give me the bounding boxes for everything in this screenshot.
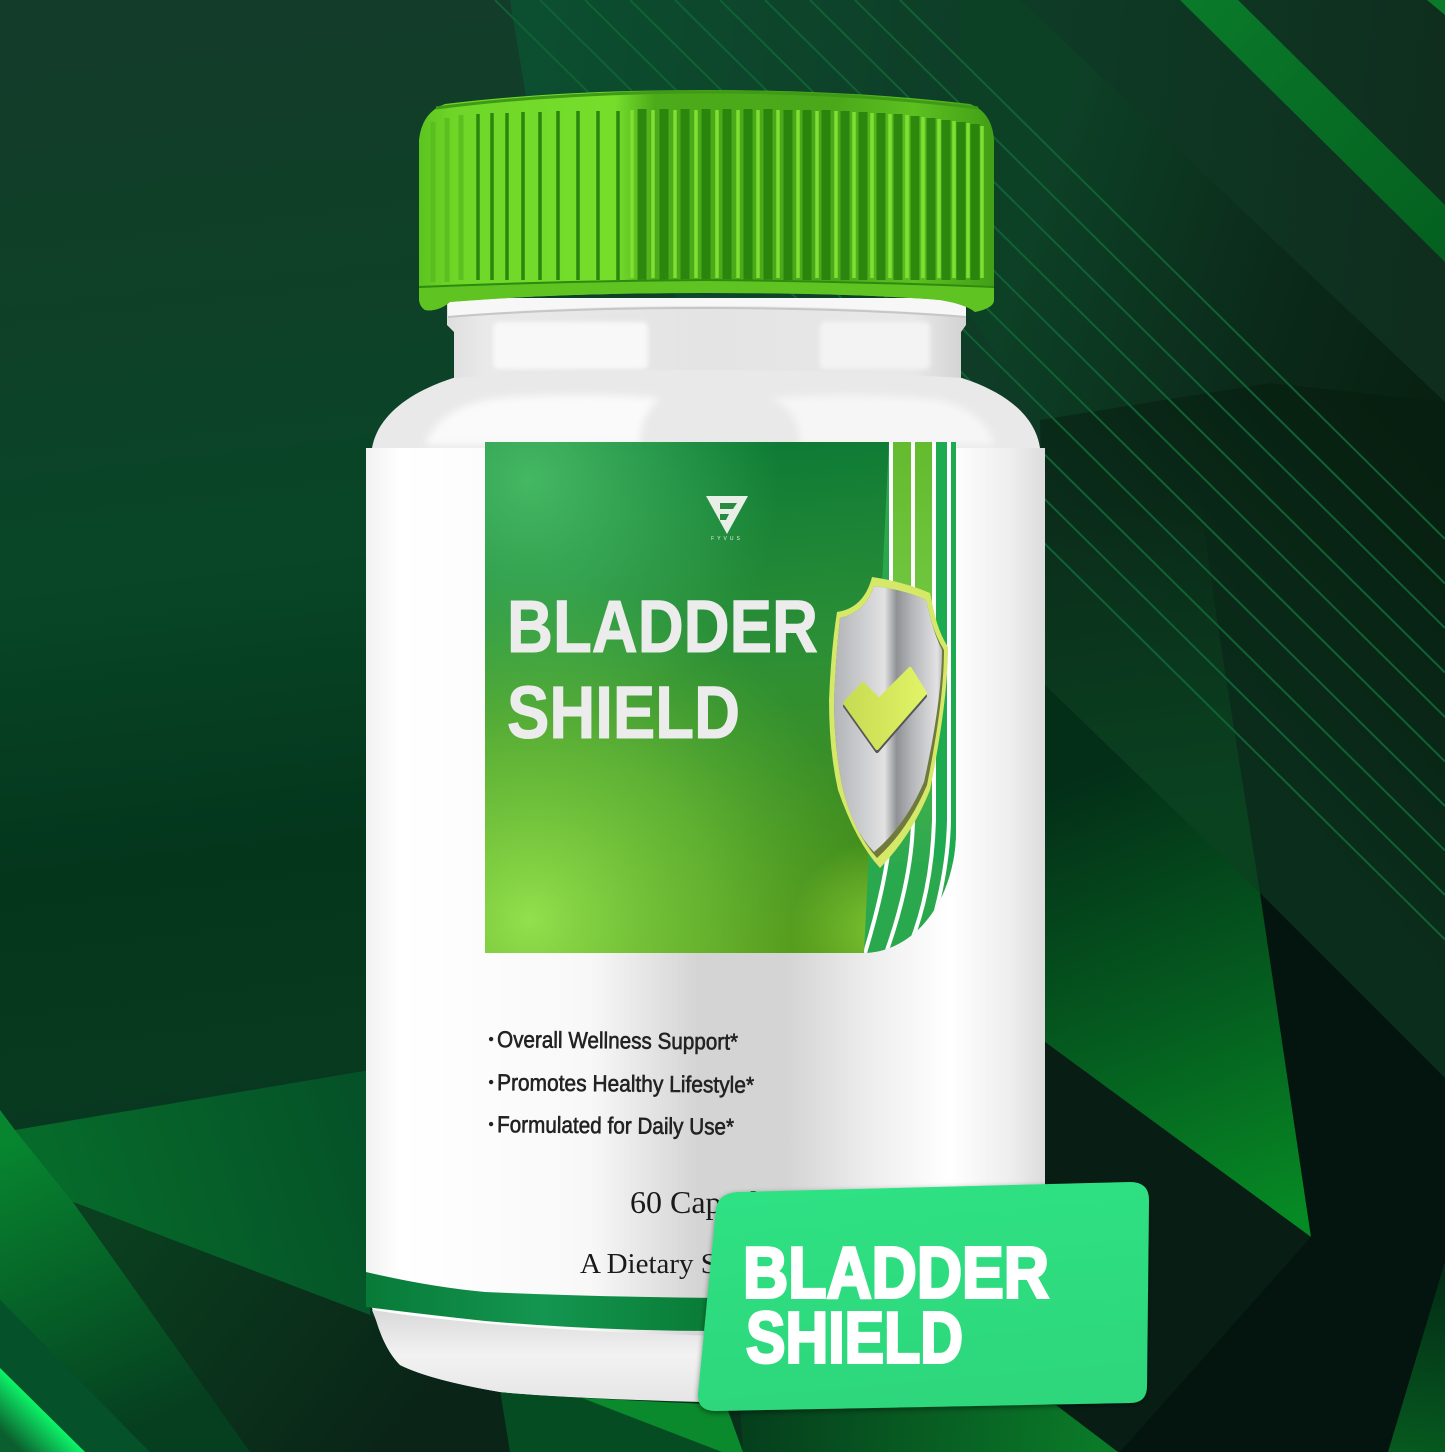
badge title: SHIELD [746,1298,963,1378]
brand logo [706,496,748,542]
dietary supplement text: A Dietary Supplement [580,1248,839,1280]
icon: shield with check [829,577,948,868]
brand logo: FYVUS [711,536,743,542]
bottle neck [447,298,966,385]
bottle bottom stripe [366,1272,720,1331]
capsule count: 60 Capsules [630,1184,786,1220]
label title: SHIELD [507,671,740,754]
bottle cap [419,90,994,312]
label title: BLADDER [507,585,818,668]
benefits list [489,1026,754,1140]
label title [507,585,818,754]
benefit two: Promotes Healthy Lifestyle* [497,1069,754,1098]
cap ridges [433,109,982,282]
badge title [743,1234,1049,1378]
benefit three: Formulated for Daily Use* [497,1111,734,1140]
bottle body [366,448,1045,1402]
bottle [366,90,1045,1402]
badge title: BLADDER [743,1234,1049,1314]
benefit one: Overall Wellness Support* [497,1026,738,1055]
product label panel [485,442,960,962]
bottle shoulder [372,370,1040,448]
label stripes [860,442,960,962]
badge [698,1182,1149,1411]
bottle base shading [372,1310,720,1402]
